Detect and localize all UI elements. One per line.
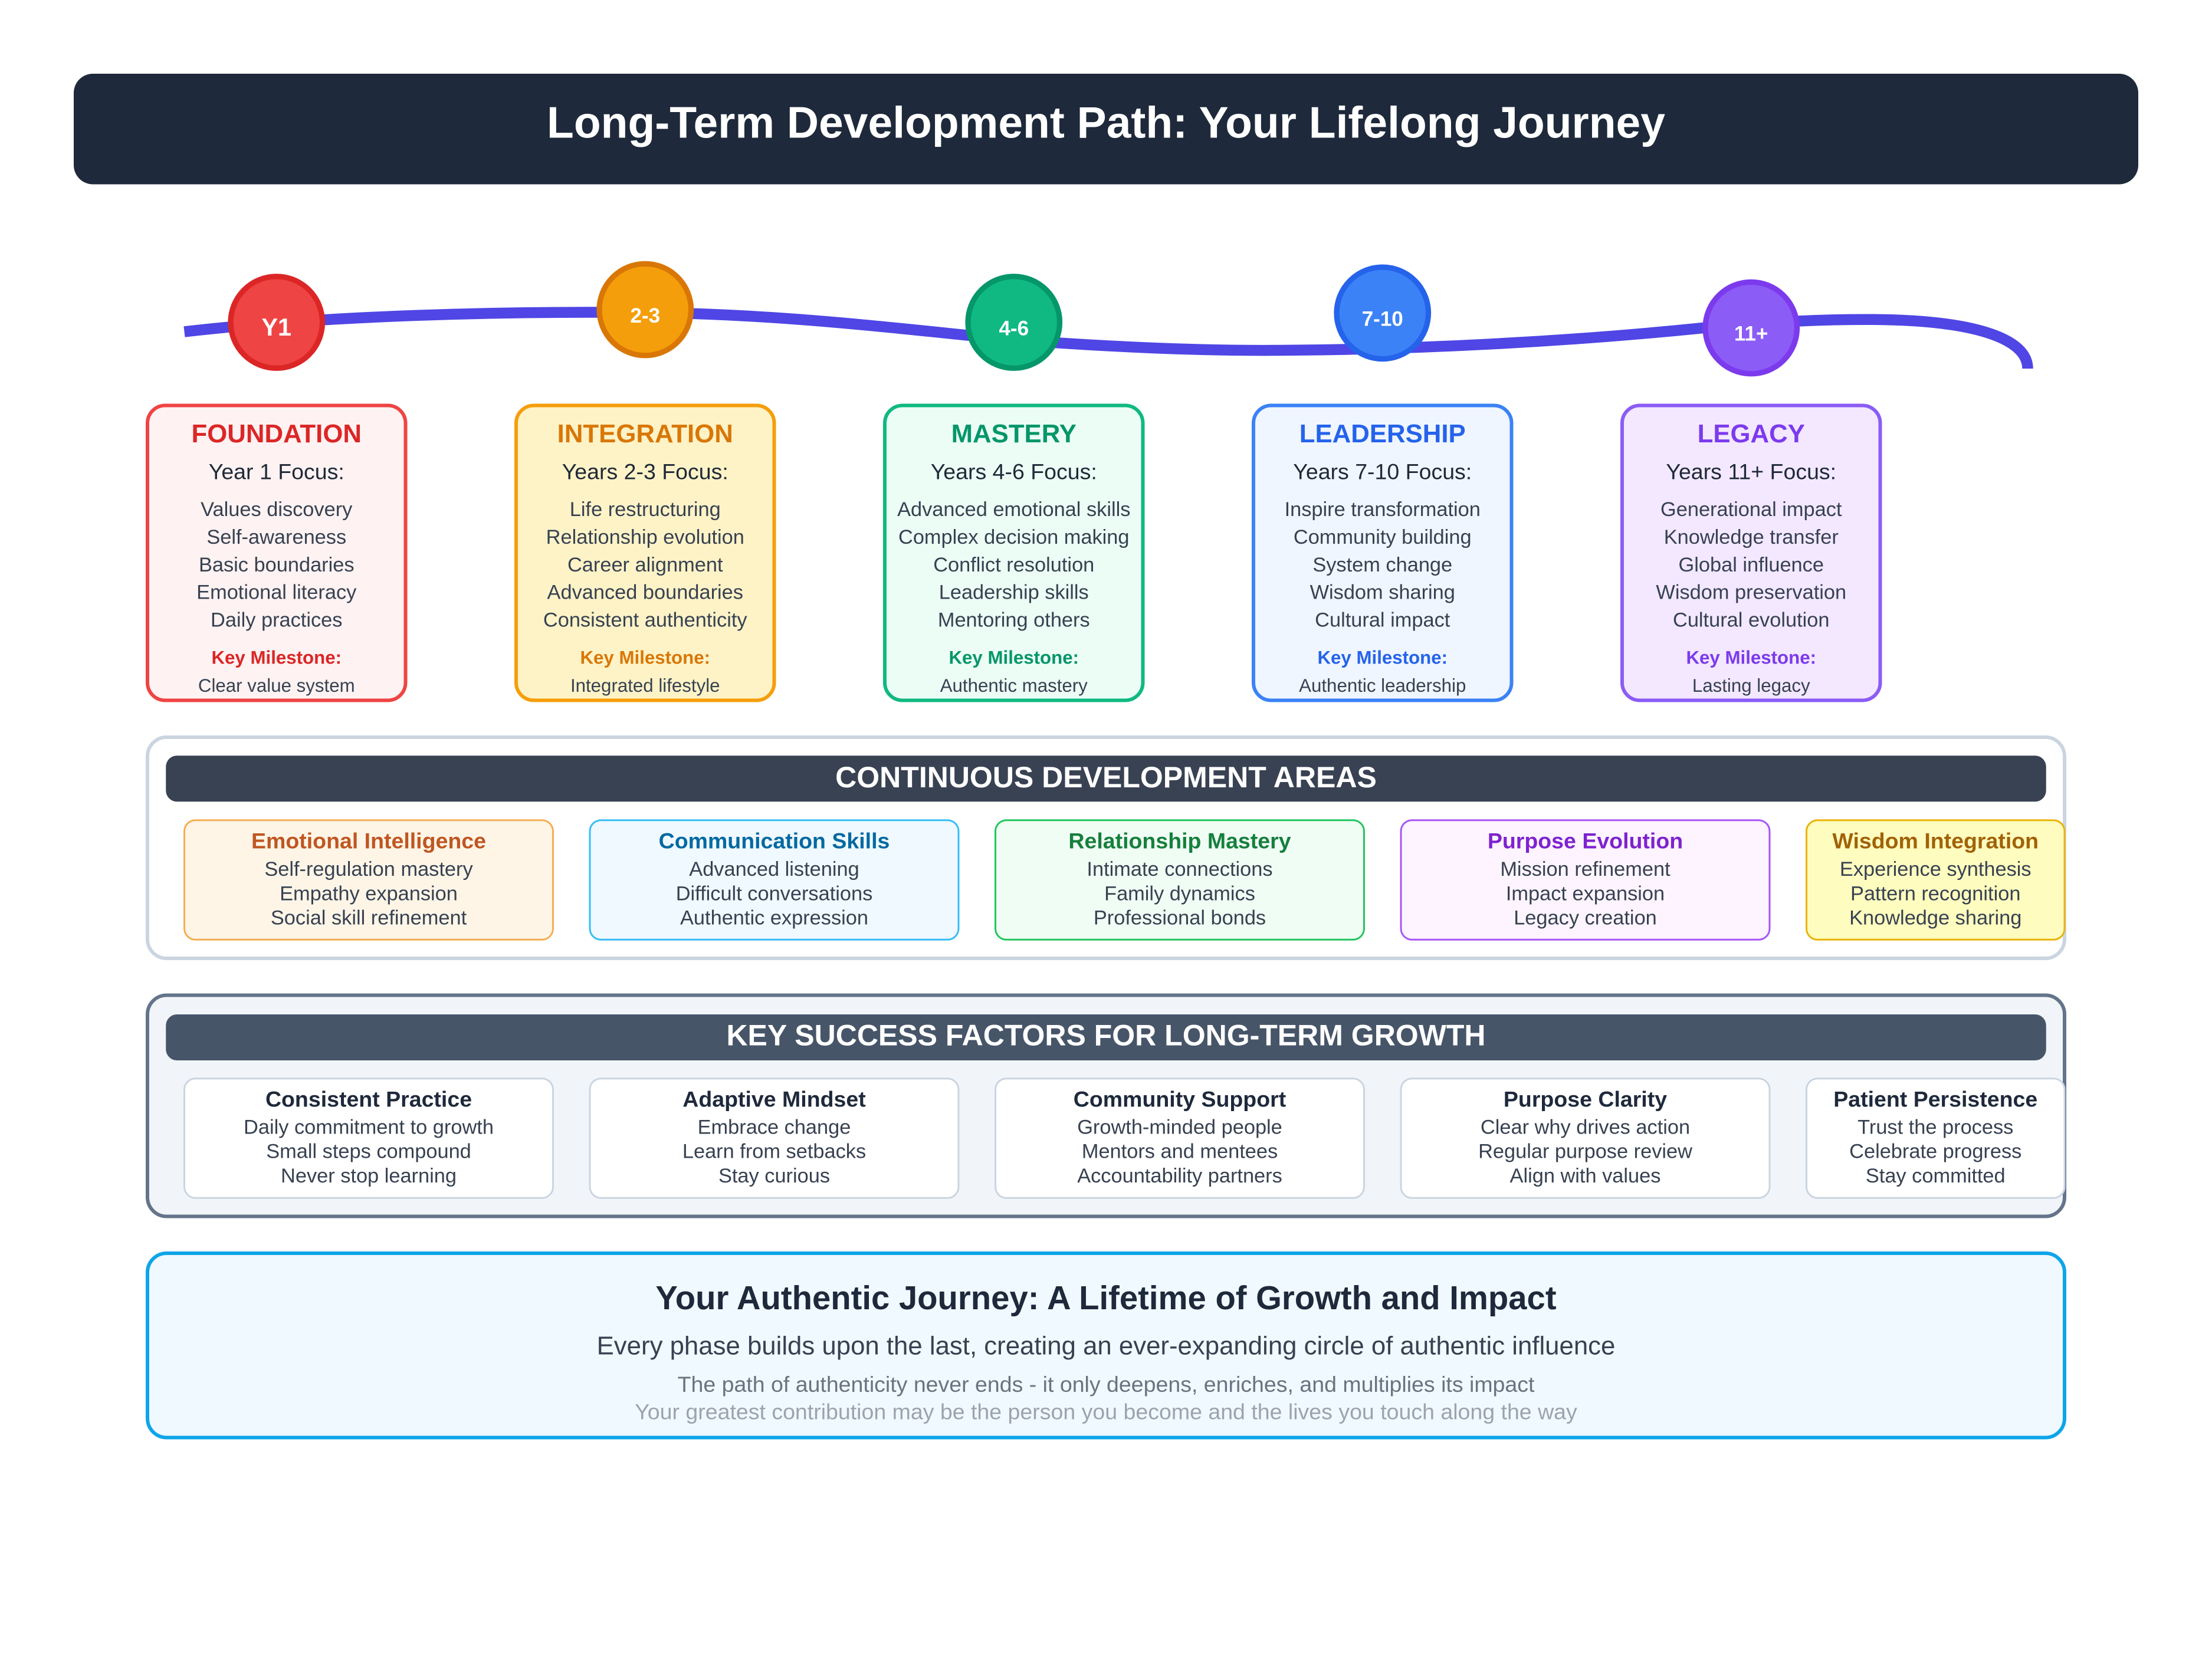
milestone marker: 7-10: 7-10 [1362, 308, 1403, 331]
panel: foundation: Clear value system [198, 675, 355, 696]
card: relationship mastery: Family dynamics [1104, 882, 1255, 905]
panel: leadership: Years 7-10 Focus: [1293, 459, 1472, 484]
card: communication skills: Authentic expression [680, 906, 868, 929]
card: community support: Mentors and mentees [1082, 1141, 1278, 1163]
card: wisdom integration: Knowledge sharing [1849, 906, 2021, 929]
card: purpose evolution: Legacy creation [1514, 906, 1657, 929]
card: emotional intelligence [184, 820, 553, 939]
card: adaptive mindset: Learn from setbacks [682, 1141, 866, 1163]
card: emotional intelligence: Social skill refinement [271, 906, 467, 929]
panel: integration: Key Milestone: [580, 648, 710, 668]
panel: mastery: Years 4-6 Focus: [931, 459, 1097, 484]
card: wisdom integration: Wisdom Integration [1832, 828, 2039, 853]
panel: integration: Consistent authenticity [543, 609, 747, 632]
panel: legacy [1622, 406, 1880, 701]
panel: integration: Advanced boundaries [547, 582, 743, 604]
card: relationship mastery [996, 820, 1364, 939]
panel: mastery: Key Milestone: [949, 648, 1079, 668]
card: consistent practice: Daily commitment to growth [244, 1116, 494, 1139]
panel: foundation: Daily practices [211, 609, 342, 632]
panel: foundation: Basic boundaries [199, 554, 355, 576]
card: wisdom integration [1806, 820, 2065, 939]
title banner: Long-Term Development Path: Your Lifelong Journey [547, 98, 1665, 147]
card: relationship mastery: Professional bonds [1094, 906, 1266, 929]
panel: integration: Years 2-3 Focus: [562, 459, 728, 484]
panel: foundation: Values discovery [201, 498, 353, 521]
panel: leadership: Key Milestone: [1317, 648, 1448, 668]
card: adaptive mindset [590, 1079, 959, 1198]
milestone marker: 2-3 [599, 264, 691, 356]
card: purpose clarity: Clear why drives action [1481, 1116, 1690, 1139]
panel: continuous development areas [147, 737, 2065, 958]
panel: legacy: Wisdom preservation [1656, 582, 1846, 604]
panel: mastery: Advanced emotional skills [897, 498, 1130, 521]
section heading: KEY SUCCESS FACTORS FOR LONG-TERM GROWTH [726, 1019, 1486, 1052]
card: patient persistence [1806, 1079, 2065, 1198]
card: consistent practice: Small steps compound [266, 1141, 471, 1163]
card: community support: Growth-minded people [1077, 1116, 1282, 1139]
card: purpose evolution [1401, 820, 1770, 939]
panel: legacy: Key Milestone: [1686, 648, 1816, 668]
card: relationship mastery: Relationship Mastery [1068, 828, 1291, 853]
card: purpose clarity: Align with values [1510, 1165, 1660, 1187]
card: patient persistence: Patient Persistence [1833, 1086, 2037, 1111]
panel: closing message: The path of authenticity never ends - it only deepens, enriches, and multiplies its impact [678, 1372, 1535, 1397]
panel: leadership: Wisdom sharing [1310, 582, 1455, 604]
card: community support [996, 1079, 1364, 1198]
panel: foundation: Year 1 Focus: [209, 459, 344, 484]
panel: closing message: Your greatest contribution may be the person you become and the lives you touch along the way [635, 1399, 1577, 1424]
panel: mastery: Authentic mastery [940, 675, 1088, 696]
panel: foundation [147, 406, 406, 701]
panel: leadership: System change [1312, 554, 1452, 576]
panel: legacy: Cultural evolution [1673, 609, 1829, 632]
card: consistent practice: Never stop learning [281, 1165, 457, 1187]
panel: mastery: Leadership skills [939, 582, 1089, 604]
card: purpose evolution: Mission refinement [1500, 858, 1671, 881]
panel: legacy: LEGACY [1698, 419, 1805, 448]
milestone marker: Y1: Y1 [262, 314, 291, 341]
section heading [166, 1014, 2046, 1060]
panel: legacy: Global influence [1679, 554, 1824, 576]
panel: integration: INTEGRATION [557, 419, 733, 448]
card: purpose clarity: Purpose Clarity [1504, 1086, 1667, 1111]
card: community support: Accountability partners [1077, 1165, 1282, 1187]
milestone marker: 2-3: 2-3 [630, 304, 660, 327]
card: purpose clarity [1401, 1079, 1770, 1198]
card: communication skills [590, 820, 959, 939]
panel: closing message [147, 1253, 2065, 1438]
panel: integration: Life restructuring [570, 498, 721, 521]
panel: leadership: Inspire transformation [1285, 498, 1481, 521]
panel: integration [516, 406, 774, 701]
card: patient persistence: Trust the process [1857, 1116, 2013, 1139]
card: wisdom integration: Experience synthesis [1840, 858, 2032, 881]
panel: leadership: Cultural impact [1315, 609, 1450, 632]
panel: foundation: Key Milestone: [211, 648, 342, 668]
card: communication skills: Communication Skills [659, 828, 890, 853]
panel: integration: Integrated lifestyle [570, 675, 720, 696]
title banner [74, 74, 2138, 185]
panel: foundation: Emotional literacy [196, 582, 357, 604]
card: adaptive mindset: Adaptive Mindset [682, 1086, 866, 1111]
card: purpose clarity: Regular purpose review [1478, 1141, 1692, 1163]
panel: mastery [885, 406, 1143, 701]
card: emotional intelligence: Self-regulation mastery [264, 858, 473, 881]
panel: mastery: Mentoring others [938, 609, 1090, 632]
card: communication skills: Advanced listening [689, 858, 859, 881]
panel: leadership [1253, 406, 1511, 701]
panel: mastery: MASTERY [951, 419, 1077, 448]
panel: legacy: Generational impact [1660, 498, 1842, 521]
card: purpose evolution: Impact expansion [1506, 882, 1665, 905]
card: purpose evolution: Purpose Evolution [1488, 828, 1683, 853]
milestone marker: 7-10 [1337, 267, 1429, 359]
card: emotional intelligence: Empathy expansion [280, 882, 458, 905]
milestone marker: 11+: 11+ [1734, 323, 1768, 346]
panel: closing message: Your Authentic Journey: A Lifetime of Growth and Impact [655, 1279, 1557, 1316]
milestone marker: 4-6: 4-6 [999, 317, 1029, 340]
panel: legacy: Knowledge transfer [1664, 526, 1839, 548]
card: communication skills: Difficult conversations [676, 882, 872, 905]
panel: closing message: Every phase builds upon the last, creating an ever-expanding circle of authentic influence [597, 1331, 1615, 1360]
card: consistent practice [184, 1079, 553, 1198]
card: wisdom integration: Pattern recognition [1850, 882, 2020, 905]
panel: mastery: Complex decision making [898, 526, 1130, 548]
card: emotional intelligence: Emotional Intelligence [251, 828, 486, 853]
card: relationship mastery: Intimate connections [1087, 858, 1273, 881]
milestone marker: 11+ [1705, 282, 1797, 374]
panel: legacy: Lasting legacy [1692, 675, 1810, 696]
card: patient persistence: Stay committed [1866, 1165, 2006, 1187]
milestone marker: Y1 [231, 277, 322, 368]
card: adaptive mindset: Embrace change [698, 1116, 851, 1139]
card: community support: Community Support [1074, 1086, 1286, 1111]
panel: leadership: Community building [1294, 526, 1472, 548]
panel: legacy: Years 11+ Focus: [1666, 459, 1836, 484]
panel: leadership: LEADERSHIP [1299, 419, 1466, 448]
section heading: CONTINUOUS DEVELOPMENT AREAS [835, 761, 1377, 794]
timeline path [184, 313, 2028, 369]
panel: integration: Career alignment [567, 554, 723, 576]
section heading [166, 755, 2046, 801]
panel: foundation: FOUNDATION [192, 419, 362, 448]
card: consistent practice: Consistent Practice [265, 1086, 472, 1111]
card: patient persistence: Celebrate progress [1849, 1141, 2021, 1163]
milestone marker: 4-6 [968, 277, 1060, 368]
panel: key success factors [147, 996, 2065, 1216]
panel: integration: Relationship evolution [546, 526, 744, 548]
panel: mastery: Conflict resolution [933, 554, 1094, 576]
panel: foundation: Self-awareness [206, 526, 346, 548]
card: adaptive mindset: Stay curious [718, 1165, 830, 1187]
panel: leadership: Authentic leadership [1299, 675, 1466, 696]
